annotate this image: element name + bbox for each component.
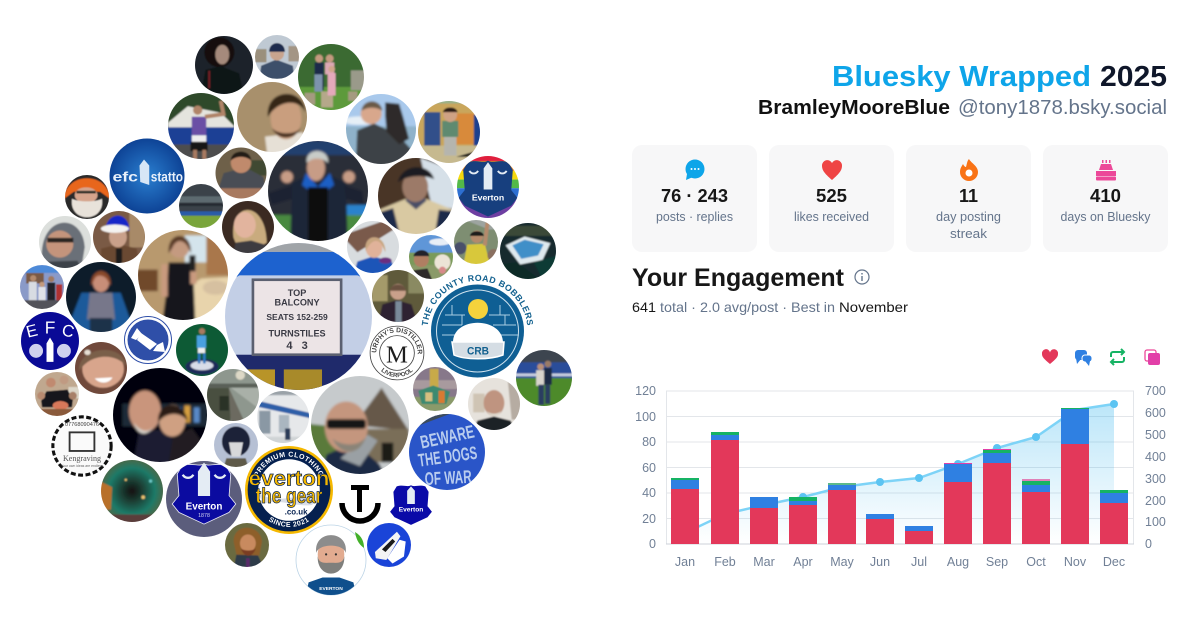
left axis labels: 0 — [649, 537, 656, 551]
month labels: Mar — [753, 555, 775, 569]
stat card: likes received: 525 — [816, 186, 847, 206]
avatar: cartoon man in blue shirt: EVERTON — [319, 586, 343, 592]
month labels: Jan — [675, 555, 695, 569]
avatar: couple on pitch — [510, 344, 578, 412]
avatar: everton the gear logo — [245, 446, 333, 534]
avatar: county road bobblers badge: CRB — [467, 346, 489, 358]
avatar: Murphy's Distillery logo — [370, 326, 424, 380]
month labels: May — [830, 555, 855, 569]
avatar: man in suit — [372, 270, 424, 322]
stat card: posts and replies: 76 · 243 — [661, 186, 728, 206]
month labels: Apr — [793, 555, 813, 569]
stat card: posting streak — [906, 145, 1031, 252]
cumulative line — [685, 400, 1118, 533]
bar: Mar — [750, 497, 778, 544]
avatar: woman in blue hoodie — [347, 221, 399, 273]
avatar: subbuteo figure — [176, 324, 228, 376]
avatar: bald man in black shirt — [463, 373, 525, 435]
right axis labels: 100 — [1145, 515, 1166, 529]
icon: reposts legend — [1111, 349, 1124, 365]
month labels: Oct — [1026, 555, 1046, 569]
stat card: days on Bluesky — [1043, 145, 1168, 252]
left axis labels — [635, 384, 656, 551]
avatar: Beware the Dogs of War banner: OF WAR — [424, 466, 472, 489]
avatar: turnstile sign photo: SEATS 152-259 — [266, 312, 328, 322]
stat card: days on Bluesky: days on Bluesky — [1060, 209, 1151, 224]
avatar: everton the gear logo: .co.uk — [285, 508, 308, 517]
left axis labels: 20 — [642, 512, 656, 526]
bar: Sep — [983, 449, 1011, 544]
avatar: man with white dog — [409, 235, 453, 279]
stat card: posting streak: day posting — [936, 209, 1001, 224]
avatar: family with cake — [35, 372, 79, 416]
avatar: Everton crest on grey — [166, 461, 242, 537]
avatar: dark-haired man — [195, 36, 253, 94]
avatar: turnstile sign photo: BALCONY — [275, 297, 320, 307]
cumulative area — [685, 404, 1114, 544]
avatar: turnstile sign photo — [225, 243, 372, 390]
avatar: county road bobblers badge: THE COUNTY ROAD BOBBLERS — [422, 274, 533, 326]
legend — [1042, 349, 1160, 366]
avatar: canal path — [207, 369, 259, 421]
avatar: everton the gear logo: PREMIUM CLOTHING — [254, 452, 324, 476]
avatar: EFC logo — [21, 312, 79, 370]
month labels: Sep — [986, 555, 1008, 569]
stat card: likes received — [769, 145, 894, 252]
avatar: Kengraving logo — [51, 415, 113, 477]
left axis labels: 100 — [635, 410, 656, 424]
avatar: brown-haired man on sand — [237, 82, 307, 152]
avatar: Everton crest on grey: Everton — [186, 502, 222, 513]
month labels: Nov — [1064, 555, 1087, 569]
avatar: football boots badge — [363, 519, 415, 571]
bar: Apr — [789, 497, 817, 544]
icon: speech bubble — [686, 160, 704, 180]
title: 2025 — [1100, 61, 1167, 93]
avatar: marathon runner — [168, 93, 234, 159]
right axis labels: 600 — [1145, 406, 1166, 420]
stat card: posts and replies — [632, 145, 757, 252]
avatar: EFC logo: E — [24, 320, 40, 342]
right axis labels: 400 — [1145, 450, 1166, 464]
avatar: man in yellow shirt — [454, 220, 498, 264]
handle line: @tony1878.bsky.social — [958, 97, 1167, 119]
bar: May — [828, 483, 856, 544]
icon: likes legend — [1042, 349, 1058, 364]
avatar: turnstile sign photo: TURNSTILES — [268, 328, 326, 338]
engagement summary: 641 — [632, 299, 656, 315]
avatar: Murphy's Distillery logo: M — [386, 342, 408, 369]
avatar: Murphy's Distillery logo: LIVERPOOL — [381, 368, 413, 378]
right axis labels — [1145, 384, 1166, 551]
handle line — [758, 97, 1167, 119]
avatar: cartoon man against wall — [418, 101, 480, 163]
stat card: days on Bluesky: 410 — [1090, 186, 1121, 206]
avatar: Kengraving logo: 07768090476 — [65, 422, 99, 428]
stacked bars — [671, 408, 1128, 544]
bar: Jul — [905, 526, 933, 544]
bar: Feb — [711, 432, 739, 544]
stat card: likes received: likes received — [794, 209, 869, 224]
avatar: woman in blue robe — [66, 262, 136, 332]
avatar: Murphy's Distillery logo: MURPHY'S DISTILLERY — [372, 328, 422, 354]
avatar: blue shopfront — [257, 391, 309, 443]
grid lines — [666, 391, 1134, 544]
bar: Aug — [944, 463, 972, 544]
avatar: small Everton crest: Everton — [399, 507, 423, 514]
month labels: Dec — [1103, 555, 1125, 569]
avatar: Kengraving logo: Your own ideas are endless — [61, 464, 103, 468]
avatar: turnstile sign photo: 4 3 — [286, 340, 308, 352]
right axis labels: 700 — [1145, 384, 1166, 398]
avatar: wolf in helmet — [214, 423, 258, 467]
engagement summary: November — [839, 299, 908, 315]
avatar: couple at night — [113, 368, 207, 462]
icon: quotes legend — [1145, 350, 1160, 365]
avatar: rainbow Everton crest — [457, 156, 519, 218]
left axis labels: 120 — [635, 384, 656, 398]
bar: Jun — [866, 514, 894, 544]
avatar: everton the gear logo: the gear — [256, 485, 322, 508]
avatar: aerial stadium — [500, 223, 556, 279]
avatar: blonde woman — [222, 201, 274, 253]
avatar: Kengraving logo: Kengraving — [63, 454, 101, 463]
avatar: green eye artwork — [101, 460, 163, 522]
bar: Jan — [671, 478, 699, 544]
avatar: rainbow Everton crest: Everton — [472, 193, 504, 203]
avatar: efc statto logo — [110, 138, 184, 214]
avatar: county road bobblers badge — [422, 274, 533, 378]
avatar: man with raised fists — [268, 141, 368, 241]
title: Bluesky Wrapped — [832, 61, 1091, 93]
engagement summary: total · 2.0 avg/post · Best in — [660, 299, 835, 315]
avatar: man in cap — [255, 35, 299, 79]
chart: monthly engagement — [635, 384, 1166, 569]
month labels: Jul — [911, 555, 927, 569]
month labels: Aug — [947, 555, 969, 569]
stat card: posting streak: streak — [950, 226, 988, 241]
avatar: Beware the Dogs of War banner: THE DOGS — [417, 442, 478, 471]
icon: heart — [822, 160, 842, 180]
left axis labels: 60 — [642, 461, 656, 475]
avatar: bearded man in orange hat — [65, 175, 109, 219]
avatar: family in garden — [298, 44, 364, 110]
avatar: everton the gear logo: everton — [249, 468, 329, 491]
stat card: posting streak: 11 — [959, 186, 978, 206]
icon: info — [855, 270, 869, 284]
avatar: man in grey t-shirt — [216, 148, 266, 198]
month labels — [675, 555, 1125, 569]
avatar: Everton crest on grey: 1878 — [198, 513, 210, 519]
right axis labels: 300 — [1145, 472, 1166, 486]
avatar: man in blue santa hat — [93, 211, 145, 263]
avatar: T anchor logo — [342, 487, 378, 521]
avatar: everton the gear logo: SINCE 2021 — [269, 517, 310, 527]
avatar: efc statto logo: efc — [112, 169, 139, 184]
right axis labels: 500 — [1145, 428, 1166, 442]
avatar: smiling toddler — [75, 342, 127, 394]
icon: birthday cake — [1096, 160, 1116, 180]
avatar: Beware the Dogs of War banner: BEWARE — [418, 421, 476, 452]
stat card: posts and replies: posts · replies — [656, 209, 733, 224]
bar: Nov — [1061, 408, 1089, 544]
month labels: Jun — [870, 555, 890, 569]
bar: Dec — [1100, 490, 1128, 544]
avatar: man in grey hood — [39, 216, 91, 268]
icon: flame — [960, 159, 978, 181]
avatar: man in cream shirt — [378, 158, 454, 234]
engagement summary — [632, 299, 908, 315]
avatar cluster — [20, 35, 572, 596]
avatar: man in sunglasses by pyramid — [301, 366, 419, 484]
avatar: efc statto logo: statto — [151, 169, 183, 184]
avatar: Beware the Dogs of War banner — [401, 406, 493, 498]
icon: replies legend — [1075, 350, 1092, 366]
right axis labels: 0 — [1145, 537, 1152, 551]
avatar: toffee badge — [124, 316, 172, 364]
avatar: EFC logo: C — [60, 320, 76, 342]
avatar: colourful tower art — [409, 363, 461, 415]
bar: Oct — [1022, 479, 1050, 544]
month labels: Feb — [714, 555, 736, 569]
avatar: small Everton crest — [390, 485, 432, 525]
handle line: BramleyMooreBlue — [758, 97, 950, 119]
heading: your engagement: Your Engagement — [632, 264, 845, 292]
left axis labels: 40 — [642, 486, 656, 500]
avatar: EFC logo: F — [45, 317, 55, 337]
left axis labels: 80 — [642, 435, 656, 449]
avatar: team group photo — [20, 265, 64, 309]
avatar: man holding dog — [346, 94, 416, 164]
avatar: cartoon man in blue shirt — [296, 525, 366, 595]
avatar: woman in black dress — [138, 230, 228, 320]
avatar: painted bearded man — [221, 519, 273, 571]
avatar: turnstile sign photo: TOP — [288, 288, 306, 298]
avatar: stadium pitch — [179, 184, 223, 228]
right axis labels: 200 — [1145, 494, 1166, 508]
